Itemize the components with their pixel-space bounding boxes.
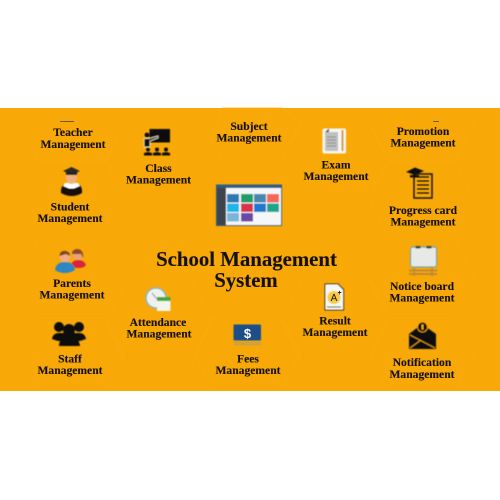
title: System [214,269,278,292]
item: notice board management: Management [389,292,455,304]
item: student management: Management [37,212,103,225]
item: teacher management: Management [40,138,106,151]
item: fees management: Management [215,364,281,377]
icon: parents [55,249,86,273]
item: class management: Class [145,162,172,175]
icon: clock and calendar [146,288,170,311]
icon: A+ result sheet [325,284,344,310]
item: class management [126,129,191,186]
item: exam management [303,128,369,183]
item: exam management: Exam [322,158,351,172]
item: fees management [215,324,281,377]
item: attendance management: Management [126,328,192,340]
item: fees management: Fees [237,352,259,366]
icon: dollar bill [234,324,261,344]
item: student management [37,167,103,225]
item: parents management: Management [39,288,105,302]
orange banner [0,108,500,391]
icon: notice board [409,246,437,276]
item: student management: Student [51,200,89,214]
central dashboard screenshot [216,184,282,226]
item: class management: Management [126,174,191,186]
item: result management: A [331,293,338,304]
item: notice board management [389,246,455,304]
item: notification management [389,322,455,381]
item: staff management: Management [37,364,103,377]
icon: graduate [61,167,82,196]
item: staff management [37,322,103,377]
icon: exam paper [322,128,346,154]
item: staff management: Staff [58,352,82,366]
item: progress card management: Progress card [389,204,458,217]
item: subject management [216,120,282,144]
item: notification management: Management [389,368,455,381]
item: promotion management: Management [390,136,456,150]
item: teacher management [40,121,106,151]
item: subject management: Management [216,132,282,144]
title [156,248,337,292]
icon: envelope with badge [409,322,436,349]
icon: report with cap [406,168,432,198]
item: notification management: Notification [393,356,452,369]
item: parents management: Parents [53,277,91,290]
item: exam management: Management [303,170,369,183]
item: parents management [39,249,105,302]
item: result management [302,284,368,339]
icon: staff group [52,322,86,346]
icon: classroom [144,129,170,156]
item: attendance management: Attendance [130,316,186,329]
item: result management: Management [302,326,368,339]
item: subject management: Subject [230,120,268,133]
item: progress card management: Management [390,216,456,228]
item: result management: + [337,290,342,297]
item: fees management: $ [244,326,252,341]
title: School Management [156,248,337,271]
item: promotion management [390,121,456,150]
item: teacher management: Teacher [53,126,93,139]
item: progress card management [389,168,458,228]
item: result management: Result [319,314,351,328]
item: promotion management: Promotion [397,125,450,138]
item: attendance management [126,288,192,340]
item: notice board management: Notice board [390,280,455,293]
